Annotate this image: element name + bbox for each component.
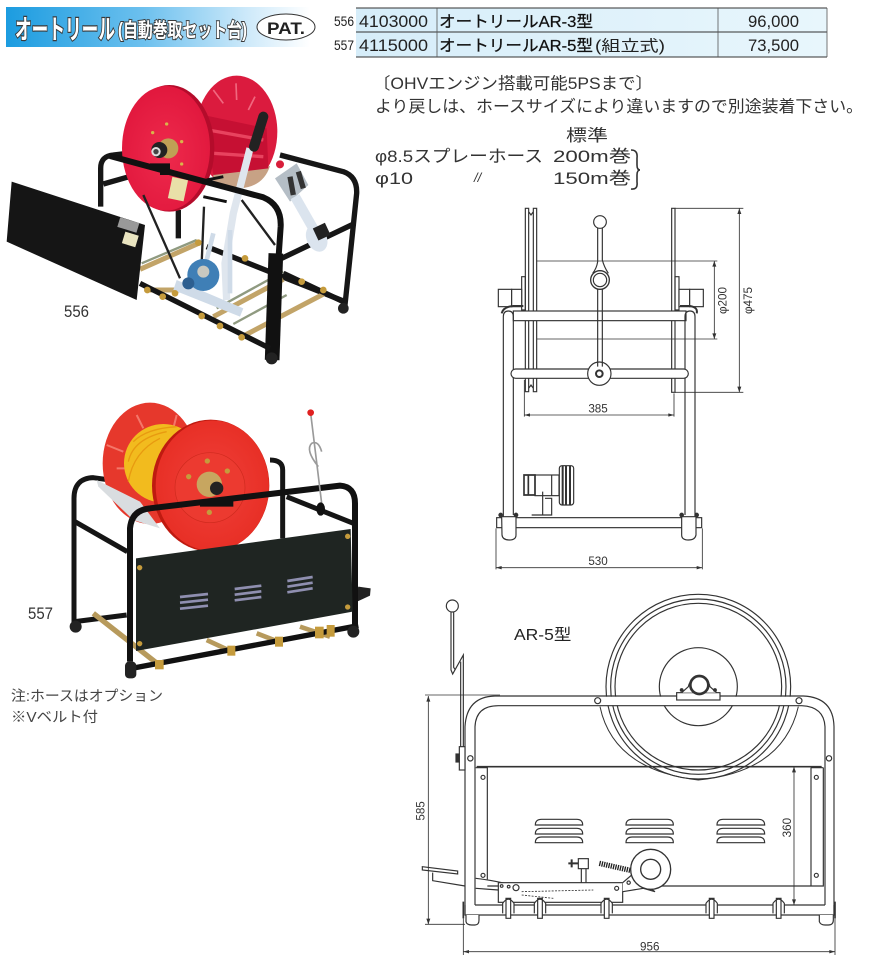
note text: 〔OHVエンジン搭載可能5PSまで〕 — [373, 74, 653, 93]
black panel — [136, 529, 353, 651]
far flange — [103, 403, 197, 524]
label: 557: 557 — [28, 604, 53, 623]
bearing block — [677, 693, 720, 700]
price table: 556 — [334, 13, 354, 29]
front frame — [130, 486, 355, 662]
lever — [309, 413, 322, 503]
pulley — [524, 475, 535, 495]
mechanism plate — [498, 883, 623, 902]
dimension labels: 530 — [588, 555, 608, 568]
dimension labels — [588, 286, 755, 568]
note text — [373, 74, 863, 116]
title banner: オートリール — [15, 15, 115, 45]
panel — [477, 764, 822, 769]
photo: 557 AR-5 reel — [70, 403, 371, 678]
drawing: AR-5 side view: 956 — [640, 941, 659, 954]
back frame — [74, 460, 353, 625]
belts and lever mechanism — [143, 195, 275, 278]
back frame — [101, 153, 357, 305]
drawing: AR-5 side view: 360 — [781, 817, 794, 837]
clamps — [144, 239, 327, 341]
price table: オートリールAR-5型 — [439, 37, 593, 55]
option note: 注:ホースはオプション — [11, 688, 163, 705]
reel — [606, 594, 791, 779]
price table: 557 — [334, 37, 354, 53]
price table — [334, 8, 827, 57]
note text: より戻しは、ホースサイズにより違いますので別途装着下さい。 — [375, 97, 863, 116]
bottom bar and feet — [497, 518, 702, 528]
photo: 556 AR-3 reel — [7, 76, 357, 364]
tensioner — [581, 868, 586, 883]
hose capacity spec: 200m巻 — [553, 147, 631, 166]
bottom rail — [132, 626, 358, 668]
PAT badge: PAT. — [267, 19, 305, 38]
hub and lever — [588, 362, 611, 385]
title banner: (自動巻取セット台) — [118, 19, 247, 42]
title banner — [6, 7, 310, 47]
hose capacity spec: φ10 — [375, 169, 413, 188]
reel — [196, 76, 277, 188]
guide roller — [275, 163, 308, 202]
bottom bar and feet — [465, 905, 834, 915]
hose — [124, 424, 203, 503]
dimension labels: φ200 — [717, 286, 730, 314]
label: 556: 556 — [64, 302, 89, 321]
drawing: AR-3 front view — [496, 208, 755, 569]
price table: オートリールAR-3型 — [439, 13, 593, 31]
price table: (組立式) — [595, 37, 665, 55]
price table: 96,000 — [748, 13, 799, 31]
price table: 73,500 — [748, 37, 799, 55]
hose capacity spec: φ8.5スプレーホース — [375, 147, 543, 166]
drawing: AR-5 side view: 585 — [415, 801, 428, 821]
pedal — [422, 867, 465, 886]
hose capacity spec: 標準 — [566, 126, 608, 145]
panel — [7, 182, 145, 300]
dimensions — [425, 695, 835, 955]
clamps — [503, 898, 784, 918]
hub — [158, 138, 178, 158]
hose capacity spec: 150m巻 — [553, 169, 631, 188]
hose capacity spec: // — [473, 170, 483, 185]
drawing: AR-5 side view: AR-5型 — [514, 626, 571, 644]
PAT badge — [257, 14, 315, 40]
dimension extension lines — [537, 208, 743, 392]
lever — [451, 612, 463, 747]
option note — [11, 688, 163, 726]
flanges — [525, 208, 537, 392]
reel through the frame — [600, 707, 798, 780]
hose capacity spec — [375, 126, 640, 189]
frame — [467, 697, 833, 705]
dimension labels: φ475 — [742, 287, 755, 314]
option note: ※Vベルト付 — [11, 709, 98, 726]
price table: 4115000 — [359, 36, 428, 55]
price table: 4103000 — [359, 12, 428, 31]
dimension labels: 385 — [588, 402, 608, 415]
frame — [513, 311, 686, 321]
slats — [140, 243, 325, 336]
drawing: AR-5 side view — [415, 594, 835, 955]
near flange — [152, 420, 269, 552]
bearings — [498, 289, 512, 307]
louvers — [535, 819, 765, 843]
front frame — [110, 156, 281, 358]
